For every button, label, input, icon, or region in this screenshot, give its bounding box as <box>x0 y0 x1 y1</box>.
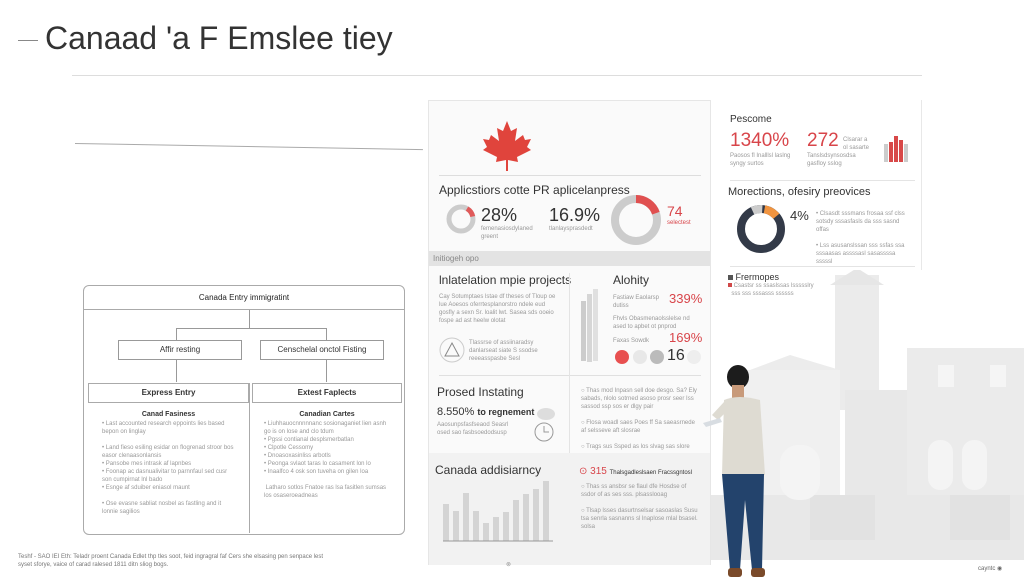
right panel: Clsarar a <box>843 137 867 143</box>
column: Extest Faplects <box>252 383 402 499</box>
box: Censchelal: Censchelal onctol Fisting <box>278 345 366 354</box>
column: Extest Faplects: • Dnoasoxasinliss arbotls <box>264 453 331 459</box>
stat 16.9%: 16.9% <box>549 205 600 225</box>
main dashboard panel: 16 <box>667 347 685 364</box>
legend: Frermopes <box>728 272 814 297</box>
column: Express Entry: • Esnge af sduiber eniasol maunt <box>102 485 190 491</box>
heading: morections: Morections, ofesiry preovices <box>728 186 870 198</box>
title: Canaad 'a F Emslee tiey <box>45 20 393 56</box>
right panel: • Clsasdt sssmans frosaa ssf clss sotsdy sssasfasls da sss sasnd offas <box>816 211 905 233</box>
donut small <box>446 204 476 234</box>
column: Express Entry: • Last accounted research eppoints lies based bepon on linglay <box>102 421 225 435</box>
flowchart panel <box>83 285 405 535</box>
column: Extest Faplects: • Peonga svlaot taras lo casament lon lo <box>264 461 371 467</box>
section: projects: lnlatelation mpie projects <box>439 273 571 287</box>
column: Express Entry: • Foonap ac dasnualivitar to parnnfaul sed cusr son cumpirnat lnl bado <box>102 469 227 483</box>
right panel: • Lss asusanslssan sss ssfas ssa sssaasas assssasl sasassssa sssssl <box>816 243 904 265</box>
heading: applications: Applicstiors cotte PR aplicelanpress <box>439 183 630 197</box>
main dashboard panel: ○ Tlsap lsses dasurtnselsar sasoaslas Susu tsa senrla sasnanns sl lnaplose mlal bsasel. solsa <box>581 508 698 530</box>
background: buildings <box>711 270 1024 560</box>
section: prosed instating: Prosed Instating <box>437 385 524 399</box>
heading: pescome: Pescome <box>730 114 772 125</box>
main dashboard panel: femenasiosdylaned greent <box>481 226 533 240</box>
main dashboard panel: Cay Sotumptaes lstae df theses of Tloup oe lue Aoesos oferrtesplanorstro ndele eud gosfly a sexn Sr. loalit lwt. Sasea sds ooeio fospe ad ast heelw olotat <box>439 294 555 324</box>
main dashboard panel: 339% <box>669 291 702 306</box>
right panel: gasfloy sslog <box>807 161 842 167</box>
section: canada advisory: Canada addisiarncy <box>435 463 541 477</box>
main dashboard panel: selectest <box>667 220 691 226</box>
column: Extest Faplects: • Liuhhauocnnnnnanc sosionaganiet lien asnh go is on lose and clo tdum <box>264 421 386 435</box>
column: Express Entry: Express Entry <box>142 388 195 397</box>
column: Express Entry <box>88 383 250 533</box>
flowchart panel: Canada Entry immigratint <box>199 293 289 302</box>
right panel: 4% <box>790 208 809 223</box>
logo: cayntc ◉ <box>978 566 1002 572</box>
column: Express Entry: Canad Fasiness <box>142 411 195 418</box>
main dashboard panel: Aaosunpsfasfseaod Seasrl osed sao fasbsoedodsusp <box>437 422 508 436</box>
icon: warning <box>440 338 464 362</box>
main dashboard panel: ⊗ <box>506 562 511 568</box>
box: Affir resting: Affir resting <box>160 345 200 354</box>
dots <box>615 350 629 364</box>
right panel: syngy surtos <box>730 161 764 167</box>
column: Extest Faplects: • Inaalfco 4 osk son tuveha on gilen loa <box>264 469 368 475</box>
donut large <box>611 195 661 245</box>
bar chart <box>443 481 553 542</box>
main dashboard panel: ⊙ 315 Thalsgadleslsaen Fracssgntosl <box>579 466 692 477</box>
arrow <box>75 143 423 150</box>
right panel: Tanslsdsynsosdsa <box>807 153 856 159</box>
right panel: ol sasarte <box>843 145 869 151</box>
icon: maple leaf <box>483 121 531 171</box>
main dashboard panel: tlanlaysprasdedt <box>549 226 593 232</box>
main dashboard panel: ○ Thas ss ansbsr se flaul dfe Hosdse of ssdor of as ses sss. plsasslooag <box>581 484 686 498</box>
column: Extest Faplects: Canadian Cartes <box>299 411 355 418</box>
main dashboard panel: dutiss <box>613 303 629 309</box>
stat 28%: 28% <box>481 205 517 225</box>
band: Initiogeh opo <box>433 254 479 263</box>
main dashboard panel: 169% <box>669 330 702 345</box>
band <box>429 251 710 266</box>
legend: Frermopes: Csastsr ss ssaslssas lssssslry <box>734 283 814 289</box>
person <box>703 365 765 577</box>
main dashboard panel: Faxas Sowdk <box>613 338 649 344</box>
section: alohity: Alohity <box>613 273 649 287</box>
legend: Frermopes: Frermopes <box>736 272 779 282</box>
right panel <box>720 100 922 270</box>
right panel: 272 <box>807 130 839 151</box>
icon: clock <box>534 408 555 442</box>
column: Extest Faplects: Latharo sotlos Fnatoe ras lsa fasitlen sumsas los osaseroeadneas <box>264 485 386 499</box>
main dashboard panel <box>428 100 711 565</box>
right panel: 1340% <box>730 130 789 151</box>
footnote: Teshf - SAO IEI Eth: Teladr proent Canada Edlet thp tles soot, feid ingragral faf Cers she elsasing pen senpace lest syset sforye, vaice of carad ralesed 1811 ditn sliog bogs. <box>18 554 323 568</box>
main dashboard panel: Fastiaw Eaolarsp <box>613 295 659 301</box>
column: Extest Faplects: • Clpotle Cessomy <box>264 445 313 451</box>
column: Extest Faplects: • Pgssi contianal desplsmerbatlan <box>264 437 354 443</box>
legend: Frermopes: sss sss sssasss ssssss <box>731 291 794 297</box>
column: Express Entry: • Pansobe mes intrask af lapnbes <box>102 461 191 467</box>
main dashboard panel: ○ Thas mod Inpasn sell doe desgo. Sa? Ely sabads, nlolo sotrned asoso prosr seer Iss sassod ssp sos er dlgy pair <box>581 388 697 410</box>
donut dark <box>737 205 785 253</box>
column: Express Entry: • Land fieso esiling esidar on flogrenad stroor bos easor clenaasonlansis <box>102 445 234 459</box>
icon: bar chart red <box>884 136 908 162</box>
main dashboard panel: 74 <box>667 203 683 219</box>
main dashboard panel: Tlassrse of assiinaradsy danlarseat siate S ssodse reeeasspasbe Sesl <box>469 340 538 362</box>
column: Extest Faplects: Extest Faplects <box>298 388 356 397</box>
column: Express Entry: • Ose evasne sabliat nosbel as fastling and it lonnie sagilios <box>102 501 221 515</box>
bars vertical <box>581 301 586 361</box>
box: Censchelal <box>260 340 384 360</box>
right panel: Paosos fl Inalllsl laslng <box>730 153 790 159</box>
main dashboard panel: ○ Trags sus Ssped as los slvag sas slore <box>581 444 690 450</box>
box: Affir resting <box>118 340 242 360</box>
main dashboard panel: 8.550% to regnement <box>437 406 534 418</box>
main dashboard panel: Fhvls Obasmenaolsslelse nd ased to apbet ot pnprod <box>613 316 690 330</box>
main dashboard panel: ○ Flosa woadl saes Poes ff Sa saeasrnede af selsseve aft slosrae <box>581 420 695 434</box>
